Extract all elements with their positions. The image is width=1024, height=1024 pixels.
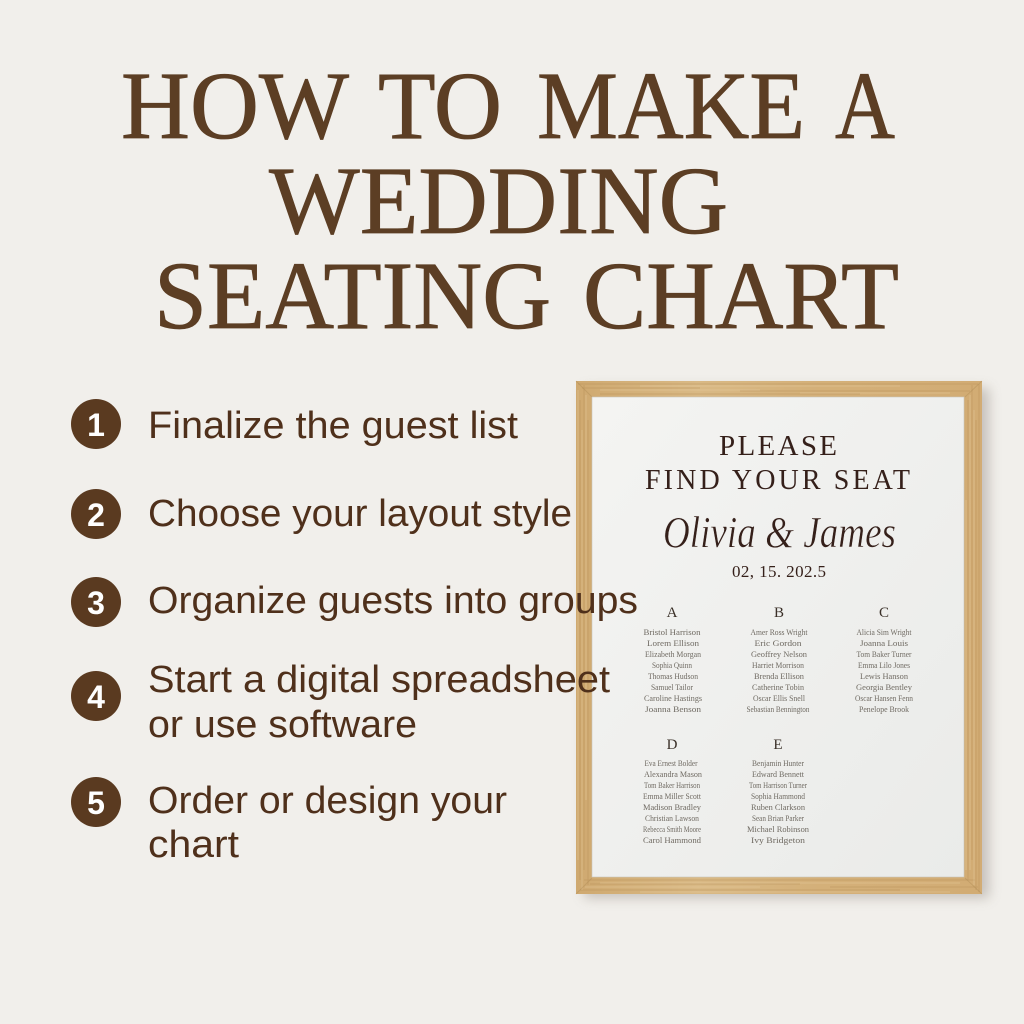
step 4 [71, 659, 610, 746]
table C: Georgia Bentley [856, 683, 912, 692]
step 2: 2 [87, 497, 105, 533]
table D: Carol Hammond [643, 836, 701, 845]
table E: Tom Harrison Turner [749, 781, 807, 790]
table D: Madison Bradley [643, 803, 701, 812]
title: TO [378, 52, 502, 159]
sign heading: PLEASE [719, 430, 837, 462]
table A: Sophia Quinn [652, 661, 692, 670]
steps list [71, 399, 638, 866]
table E: Benjamin Hunter [752, 759, 804, 768]
table C [855, 605, 913, 714]
table A: Bristol Harrison [644, 628, 700, 637]
table B: Sebastian Bennington [746, 705, 810, 714]
title: A [835, 52, 895, 159]
step 4: or use software [148, 704, 417, 746]
step 3: 3 [87, 585, 105, 621]
step 5: Order or design your [148, 780, 507, 822]
table B: Brenda Ellison [754, 672, 804, 681]
step 3: Organize guests into groups [148, 580, 638, 622]
table A: Joanna Benson [645, 705, 701, 714]
title: WEDDING [269, 147, 728, 254]
couple names: Olivia & James [663, 508, 896, 557]
table C: Alicia Sim Wright [856, 628, 912, 637]
table C: Joanna Louis [860, 639, 908, 648]
title: CHART [583, 242, 899, 349]
table B: Harriet Morrison [752, 661, 804, 670]
table D [643, 737, 702, 845]
title: SEATING [154, 242, 551, 349]
table D: Emma Miller Scott [643, 792, 702, 801]
title [121, 52, 899, 349]
step 4: 4 [87, 679, 105, 715]
table E: Sophia Hammond [751, 792, 805, 801]
table B: Amer Ross Wright [750, 628, 808, 637]
date: 02, 15. 202.5 [732, 562, 826, 581]
step 2: Choose your layout style [148, 493, 572, 535]
table D: Tom Baker Harrison [644, 781, 700, 790]
table B: Geoffrey Nelson [751, 650, 807, 659]
table C: Penelope Brook [859, 705, 909, 714]
step 1: 1 [87, 407, 105, 443]
table A: Caroline Hastings [644, 694, 702, 703]
table A: Lorem Ellison [647, 639, 699, 648]
table A [644, 605, 702, 714]
table C: Tom Baker Turner [856, 650, 912, 659]
table E: E [773, 737, 783, 753]
table E: Michael Robinson [747, 825, 809, 834]
table E: Ruben Clarkson [751, 803, 805, 812]
table B: B [774, 605, 784, 621]
sign heading [645, 430, 910, 496]
table B: Eric Gordon [754, 639, 802, 648]
table E: Sean Brian Parker [752, 814, 804, 823]
sign heading: FIND YOUR SEAT [645, 465, 910, 496]
table A: A [667, 605, 678, 621]
table E: Ivy Bridgeton [751, 836, 805, 845]
table C: Emma Lilo Jones [858, 661, 910, 670]
table E [747, 737, 809, 845]
step 4: Start a digital spreadsheet [148, 659, 610, 701]
table D: Eva Ernest Bolder [644, 759, 698, 768]
wood frame [576, 381, 982, 894]
table C: Lewis Hanson [860, 672, 908, 681]
title: MAKE [537, 52, 805, 159]
paper sign [592, 397, 964, 877]
table E: Edward Bennett [752, 770, 805, 779]
table B: Oscar Ellis Snell [753, 694, 806, 703]
step 1 [71, 399, 518, 449]
table A: Thomas Hudson [648, 672, 698, 681]
step 5 [71, 777, 507, 866]
framed seating chart [576, 381, 989, 898]
step 2 [71, 489, 572, 539]
step 5: chart [148, 824, 239, 866]
step 5: 5 [87, 785, 105, 821]
step 1: Finalize the guest list [148, 405, 518, 447]
table A: Samuel Tailor [651, 683, 693, 692]
table C: C [879, 605, 889, 621]
table B [746, 605, 810, 714]
table D: Christian Lawson [645, 814, 699, 823]
table D: Rebecca Smith Moore [643, 825, 701, 834]
table A: Elizabeth Morgan [645, 650, 701, 659]
title: HOW [121, 52, 349, 159]
table D: Alexandra Mason [644, 770, 702, 779]
table D: D [667, 737, 678, 753]
table B: Catherine Tobin [752, 683, 804, 692]
table C: Oscar Hansen Fenn [855, 694, 913, 703]
